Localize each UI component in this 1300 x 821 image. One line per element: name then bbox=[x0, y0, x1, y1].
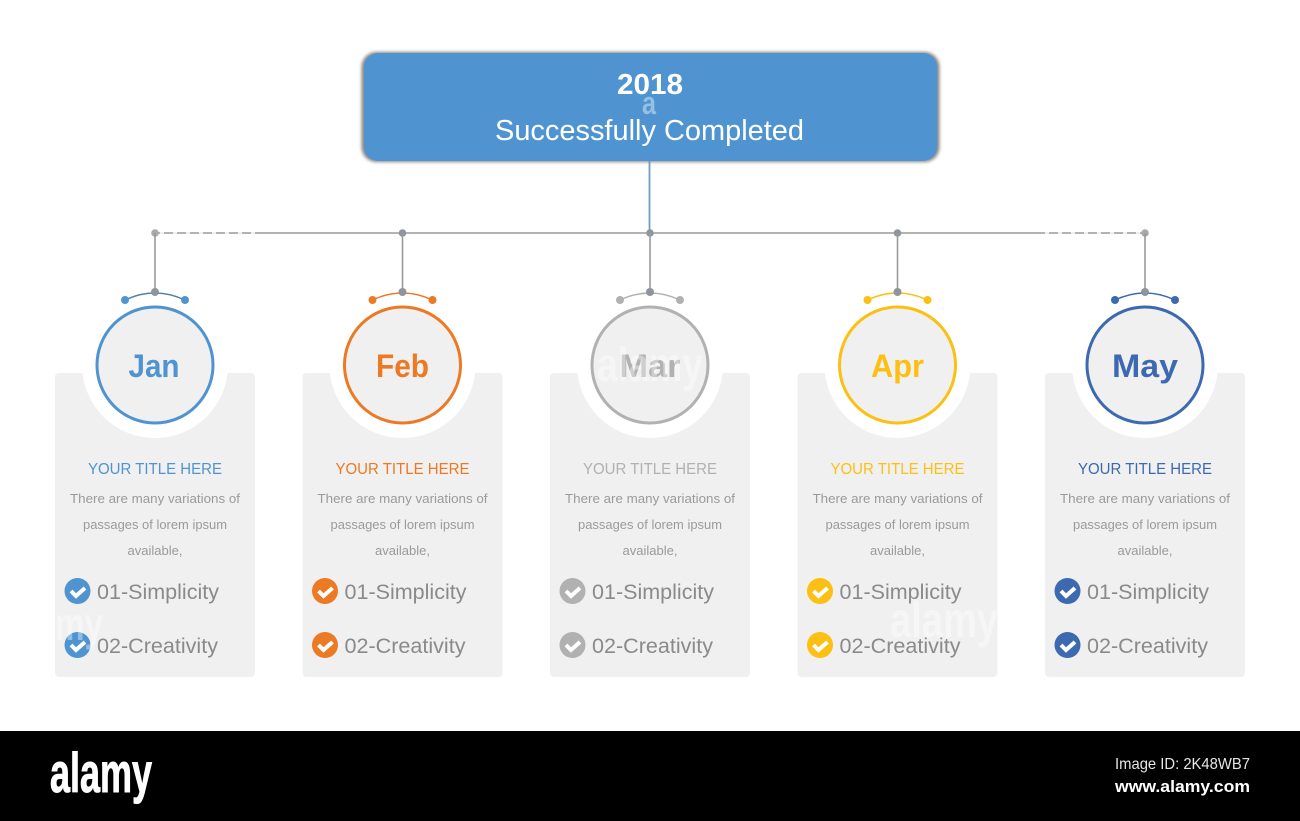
header box: a bbox=[642, 85, 656, 121]
panel: Mar: YOUR TITLE HERE bbox=[583, 461, 717, 478]
panel: Apr: 01-Simplicity bbox=[840, 580, 962, 604]
panel: Feb: There are many variations of bbox=[318, 492, 488, 506]
panel: Apr: alamy bbox=[890, 592, 998, 648]
panel: Feb: Feb bbox=[376, 348, 429, 384]
connector: header to timeline bbox=[648, 160, 650, 233]
panel: Mar: There are many variations of bbox=[565, 492, 736, 506]
panel: Mar: 02-Creativity bbox=[592, 634, 713, 658]
panel: May: There are many variations of bbox=[1060, 492, 1231, 506]
panel: Jan: available, bbox=[128, 544, 182, 558]
panel: May: 01-Simplicity bbox=[1087, 580, 1209, 604]
panel: Apr: available, bbox=[870, 544, 925, 558]
panel: Feb: passages of lorem ipsum bbox=[330, 518, 474, 532]
panel: May: available, bbox=[1118, 544, 1172, 558]
header box: Successfully Completed bbox=[495, 115, 804, 147]
panel: May: May bbox=[1112, 348, 1178, 384]
panel: Jan: There are many variations of bbox=[70, 492, 241, 506]
header box: 2018 bbox=[617, 69, 683, 101]
panel: Apr: 02-Creativity bbox=[840, 634, 961, 658]
panel: Apr: Apr bbox=[871, 348, 924, 384]
footer bar bbox=[0, 731, 1300, 821]
panel: Jan bbox=[55, 233, 255, 677]
panel: May: passages of lorem ipsum bbox=[1073, 518, 1217, 532]
header box bbox=[362, 52, 940, 162]
footer bar: www.alamy.com bbox=[1114, 777, 1250, 796]
panel: Feb bbox=[302, 233, 502, 677]
panel: Mar: available, bbox=[622, 544, 678, 558]
panel: Mar: Mar bbox=[620, 348, 680, 384]
panel: Feb: 02-Creativity bbox=[344, 634, 466, 658]
panel: Jan: my bbox=[55, 598, 103, 650]
panel: May: YOUR TITLE HERE bbox=[1078, 461, 1212, 478]
panel: Feb: 01-Simplicity bbox=[344, 580, 467, 604]
panel: Feb: YOUR TITLE HERE bbox=[336, 461, 470, 478]
panel: Apr: There are many variations of bbox=[812, 492, 983, 506]
panel: May: 02-Creativity bbox=[1087, 634, 1208, 658]
timeline horizontal connector bbox=[151, 229, 1149, 237]
panel: Jan: 02-Creativity bbox=[97, 634, 218, 658]
panel: Jan: passages of lorem ipsum bbox=[83, 518, 227, 532]
panel: Mar: 01-Simplicity bbox=[592, 580, 714, 604]
panel: Feb: available, bbox=[375, 544, 430, 558]
panel: Mar: alamy bbox=[597, 339, 703, 392]
panel: Mar: passages of lorem ipsum bbox=[578, 518, 722, 532]
footer bar: alamy bbox=[50, 741, 152, 804]
panel: May bbox=[1045, 233, 1245, 677]
panel: Jan: YOUR TITLE HERE bbox=[88, 461, 222, 478]
panel: Apr: YOUR TITLE HERE bbox=[830, 461, 964, 478]
panel: Mar bbox=[550, 233, 750, 677]
panel: Jan: 01-Simplicity bbox=[97, 580, 219, 604]
panel: Apr bbox=[798, 233, 998, 677]
panel: Jan: Jan bbox=[128, 348, 180, 384]
panel: Apr: passages of lorem ipsum bbox=[826, 518, 970, 532]
footer bar: Image ID: 2K48WB7 bbox=[1115, 756, 1250, 773]
